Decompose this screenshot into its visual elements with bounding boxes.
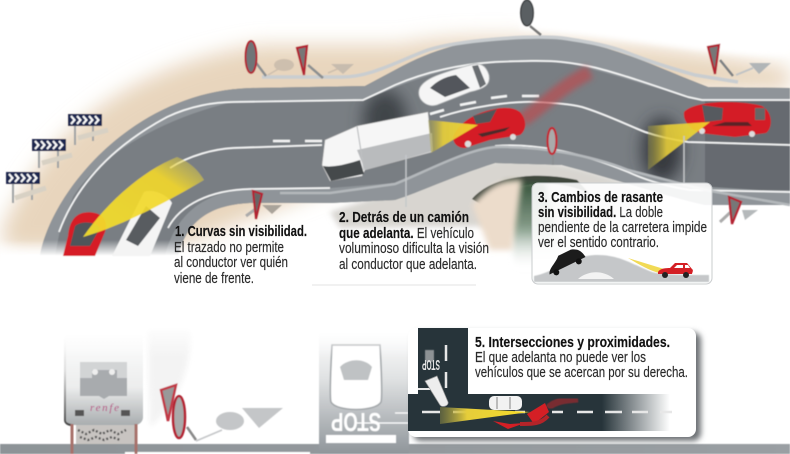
body: camión line 4: al conductor que adelanta. — [339, 256, 477, 273]
diagram: black car — [544, 245, 587, 278]
road: bottom white edge line — [168, 145, 790, 228]
road: edge white strip left — [418, 388, 430, 390]
body: curvas line 3: viene de frente. — [174, 270, 254, 287]
beam: yellow headlights at crest — [648, 122, 710, 170]
dark horizontal road — [408, 394, 670, 431]
sign pair: triangle and round — [161, 385, 283, 441]
text: intersecciones line 3: vehículos que se acercan por su derecha. — [475, 364, 688, 381]
sign: round speed limit — [246, 41, 294, 76]
sign: round sign on lower guard rail — [548, 128, 556, 165]
body: curvas line 1: El trazado no permite — [174, 239, 284, 256]
text: cambios line 3: pendiente de la carretera impide — [538, 219, 707, 236]
car: white oncoming — [419, 64, 489, 106]
body: curvas line 2: al conductor ver quién — [174, 254, 288, 271]
chevron sign 1 — [6, 172, 46, 203]
divider under text 2 — [312, 284, 476, 286]
terrain: beige ground behind the road — [0, 37, 790, 250]
beam: yellow headlights on curve — [83, 157, 204, 237]
panel shadow — [413, 332, 701, 441]
train window — [80, 362, 127, 399]
truck — [322, 112, 433, 181]
car: white on road — [489, 396, 522, 410]
tunnel green fade — [505, 182, 565, 270]
road: STOP blur — [425, 350, 434, 362]
dark vertical road — [418, 328, 468, 394]
band: road at bottom — [0, 444, 790, 454]
road: grey shoulder bottom — [165, 146, 790, 256]
text: intersecciones line 2: El que adelanta no puede ver los — [475, 349, 646, 366]
car: white top view — [330, 345, 382, 410]
heading: cambios: 3. Cambios de rasante — [538, 189, 663, 206]
road: white lines — [355, 413, 408, 423]
train rails over band — [72, 444, 136, 454]
tunnel arch — [472, 176, 590, 205]
fade: top of train and approach road — [55, 322, 415, 358]
road: stop line — [326, 435, 396, 443]
band: white strip at bottom — [125, 452, 310, 454]
train track — [76, 425, 136, 445]
panel: intersections — [408, 328, 701, 441]
diagram: red car — [658, 263, 693, 278]
chevron sign 3 — [68, 114, 108, 145]
leader line: panel 3 — [683, 136, 685, 186]
road: grey shoulder top — [30, 30, 790, 256]
road: dark shade near truck — [356, 87, 414, 126]
car: red overtaking — [453, 108, 525, 148]
car: red car on curve — [63, 212, 106, 256]
sign: triangle lower right — [720, 197, 758, 224]
ground under road — [330, 158, 660, 228]
text: curves without visibility — [174, 223, 307, 287]
leader line: panel 2 — [405, 155, 407, 207]
heading: intersecciones: 5. Intersecciones y proximidades. — [475, 334, 670, 351]
heading: camión line 1: 2. Detrás de un camión — [339, 209, 469, 226]
chevron sign 2 — [32, 139, 72, 168]
text: cambios line 4: ver el sentido contrario. — [538, 234, 659, 251]
beam: yellow — [440, 407, 530, 424]
text: cambios line 2: sin visibilidad. La doble — [538, 204, 663, 221]
car: white from side road — [425, 376, 448, 406]
diagram: beam over hill — [628, 258, 664, 273]
heading: curvas: 1. Curvas sin visibilidad. — [175, 223, 307, 240]
body: camión line 3: voluminoso dificulta la visión — [339, 240, 489, 257]
scene: road illustration — [0, 0, 790, 260]
tunnel beige wall — [472, 180, 522, 250]
faint grey shape beside train — [148, 330, 190, 427]
trail: red path of overtaking car — [522, 72, 590, 120]
panel: changes of gradient — [532, 183, 712, 284]
road: vertical approach with gradient — [319, 330, 409, 454]
scene: lower left train — [0, 322, 790, 454]
train — [65, 330, 143, 454]
panel background — [532, 183, 712, 284]
text: behind a truck — [339, 209, 489, 273]
sign: triangular warning — [297, 46, 354, 78]
road: horizontal dashes — [422, 411, 672, 413]
diagram: hill profile — [534, 255, 709, 282]
road: top white edge line — [59, 61, 790, 232]
panel: intersections: STOP — [422, 356, 440, 373]
diagram: tunnel under hill — [578, 272, 614, 279]
panel background — [408, 328, 696, 437]
car: red overtaking — [493, 403, 549, 429]
mirror on post — [520, 0, 541, 35]
sign: right triangular warning — [708, 45, 771, 76]
train logo: renfe — [90, 402, 119, 414]
road: white vertical dashes — [445, 345, 447, 388]
road: STOP marking inverted: STOP — [331, 407, 381, 437]
car: red at right — [684, 102, 771, 137]
guard rail top — [262, 37, 738, 82]
guard rail bottom — [280, 147, 790, 205]
road: dark shade at crest — [642, 118, 682, 182]
trail: red path — [548, 399, 578, 408]
sign: triangle near curve — [246, 191, 282, 219]
road surface — [40, 38, 790, 255]
heading and body: camión line 2: que adelanta. El vehículo — [339, 225, 474, 242]
road: dark right lane — [705, 100, 790, 190]
terrain: white fade at top right — [520, 0, 790, 55]
beam: yellow headlights behind truck — [428, 120, 478, 153]
road: centre dashes — [273, 96, 539, 141]
road: centre line — [170, 102, 790, 168]
left lower white fade — [0, 240, 200, 256]
car: white car on curve — [112, 191, 172, 256]
